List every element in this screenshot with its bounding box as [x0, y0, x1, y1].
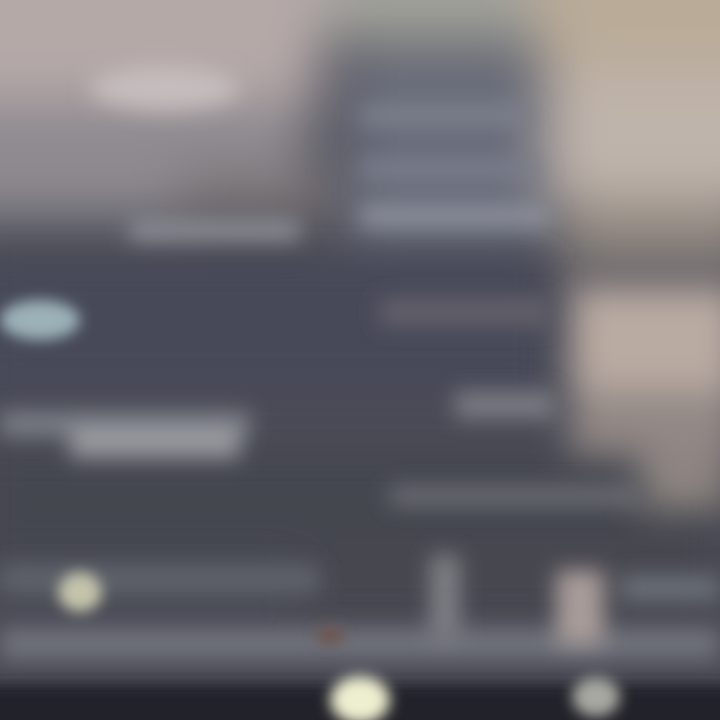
- dark ground strip: [0, 684, 720, 720]
- right beige building: [570, 285, 720, 510]
- pale highlights: [90, 66, 604, 645]
- bright lights at the bottom: [330, 676, 620, 720]
- dark mid section: [0, 260, 720, 620]
- light horizontal bands: [0, 105, 720, 660]
- small glow spots: [0, 300, 344, 645]
- sky and upper background: [0, 0, 720, 270]
